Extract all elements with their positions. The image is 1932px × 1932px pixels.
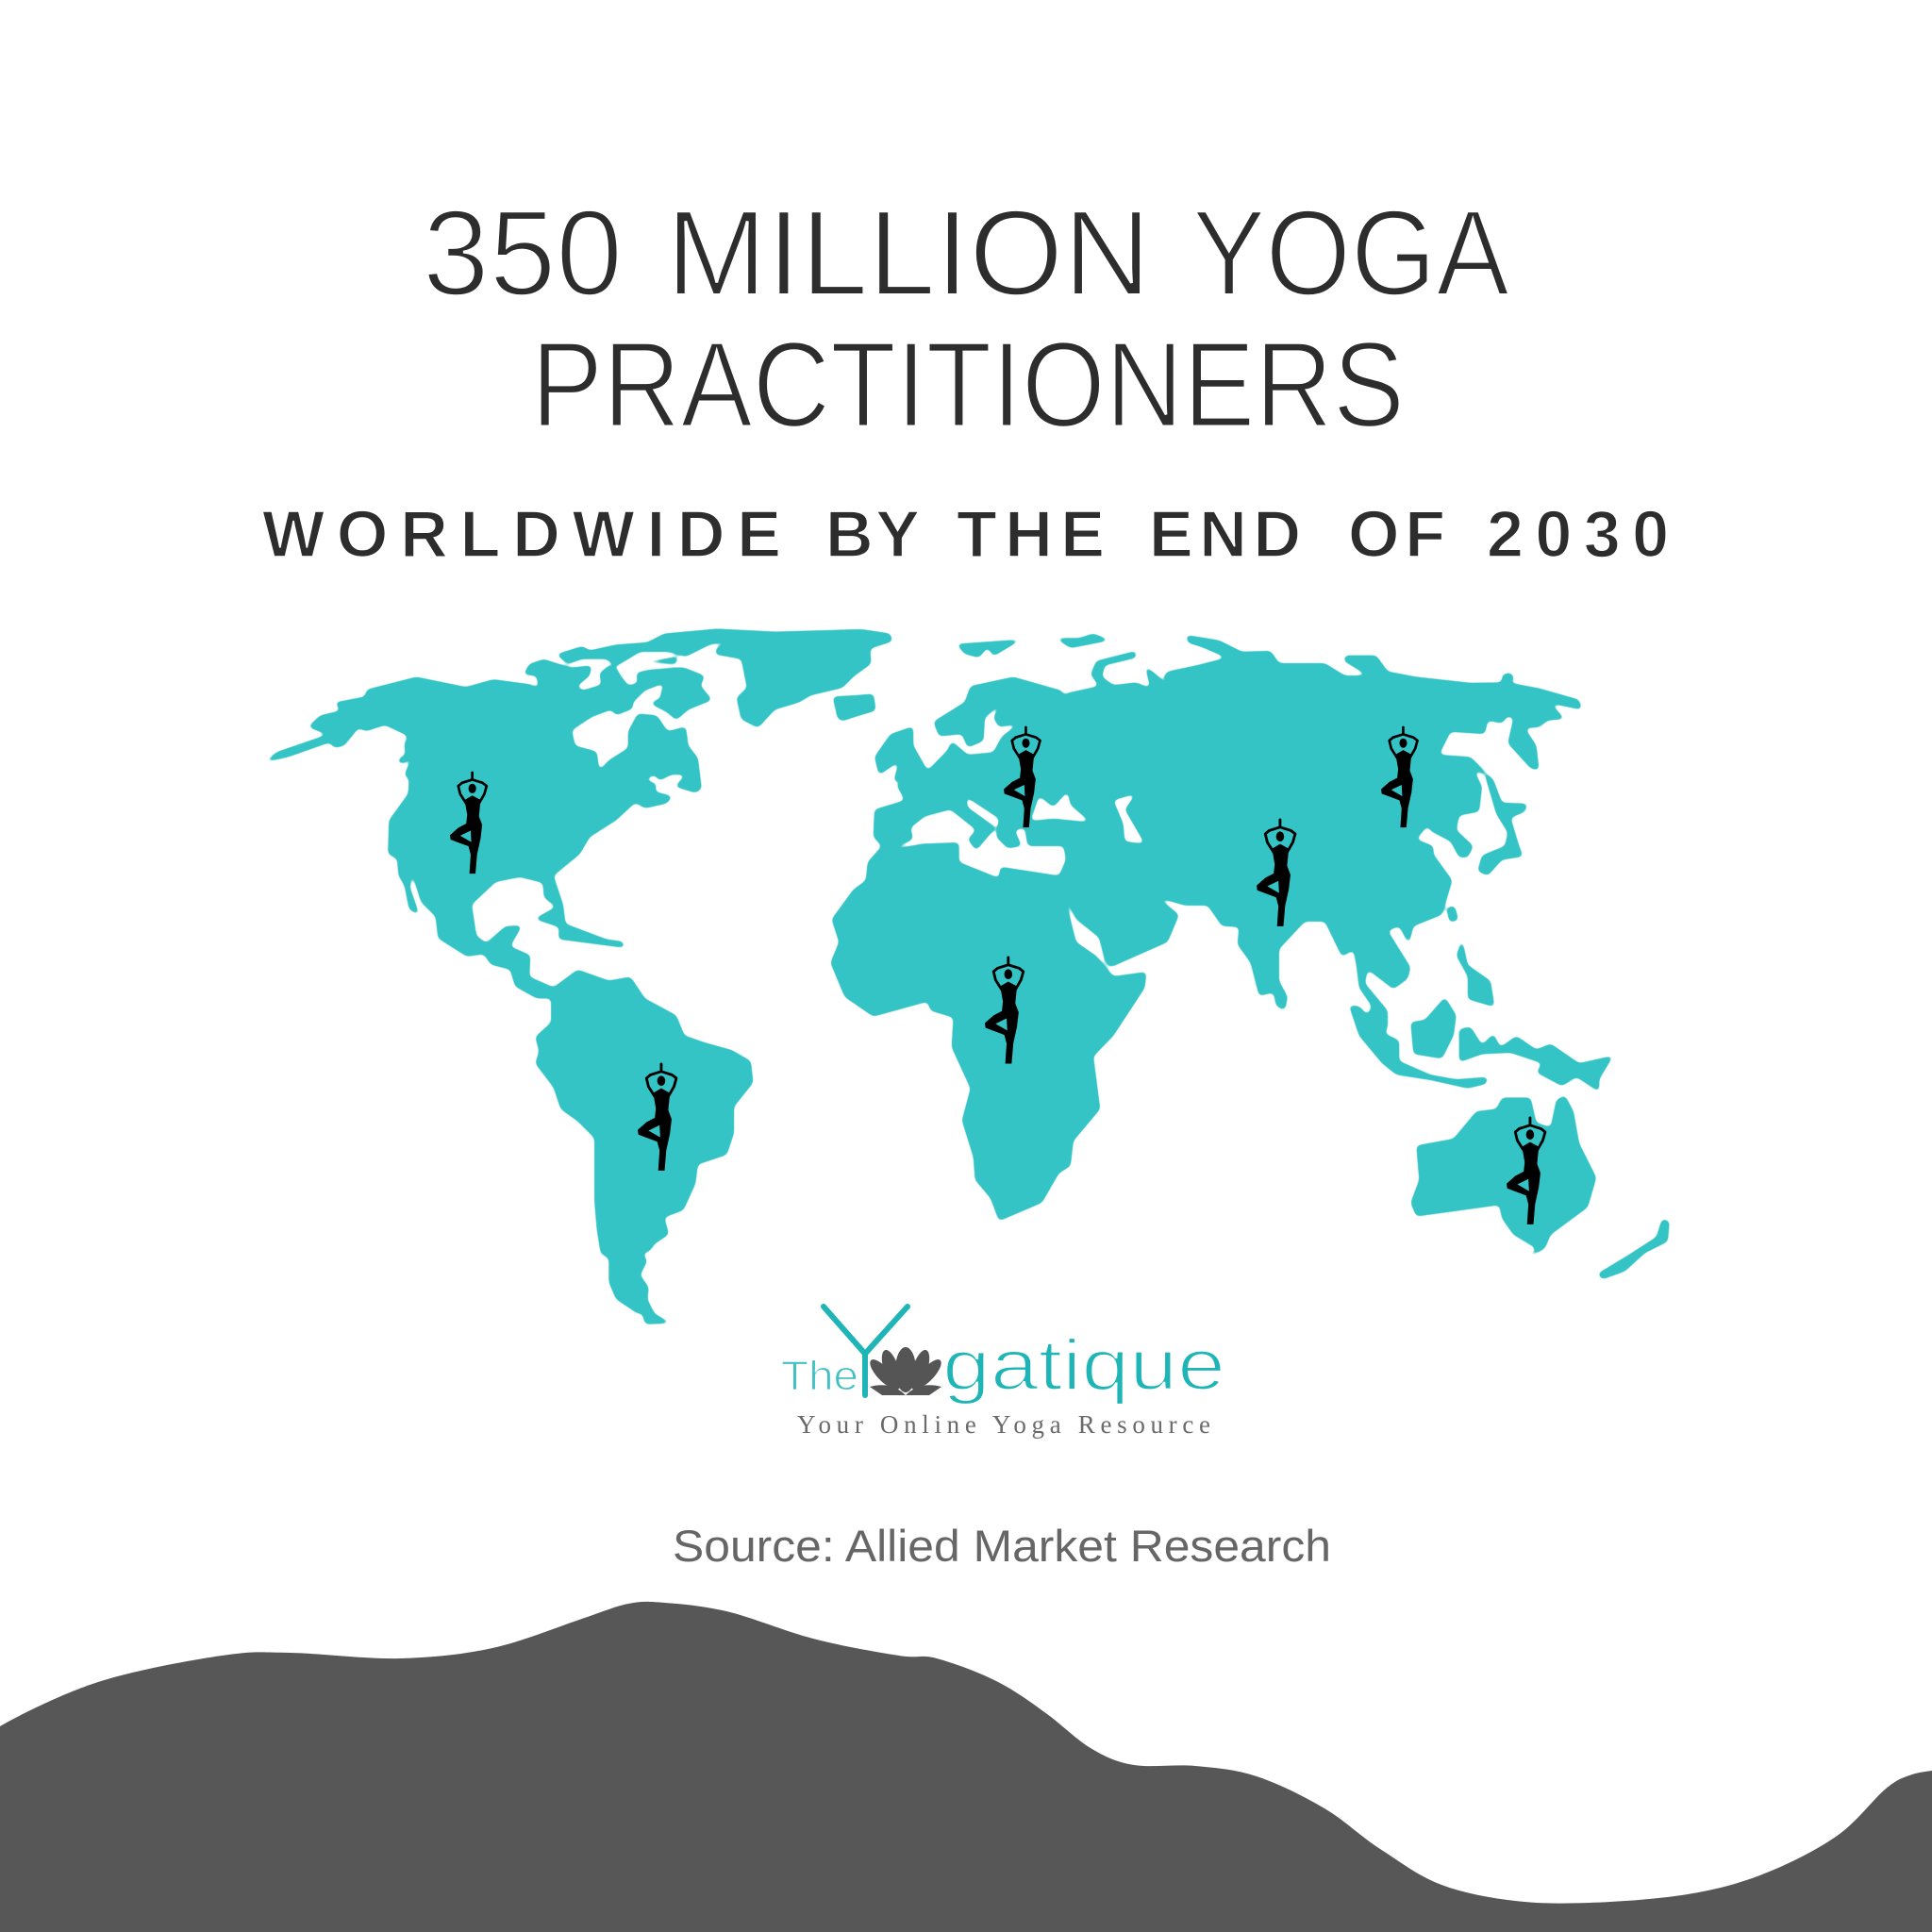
icon: yoga figure north america — [450, 773, 487, 874]
subtitle: BY — [825, 497, 920, 571]
source line: Source: Allied Market Research — [673, 1521, 1331, 1571]
icon: yoga figure south america — [638, 1064, 676, 1171]
subtitle: THE — [957, 497, 1105, 571]
logo word The: The — [781, 1353, 858, 1399]
subtitle: WORLDWIDE — [262, 497, 781, 571]
bottom hill shape — [0, 1602, 1932, 1932]
subtitle: END — [1149, 497, 1301, 571]
title: 350 million yoga practitioners: 350 — [423, 185, 623, 321]
logo tagline: Your Online Yoga Resource — [797, 1410, 1210, 1439]
logo letter Y — [824, 1307, 908, 1395]
subtitle: 2030 — [1487, 497, 1669, 571]
eurasia, africa, oceania — [830, 634, 1670, 1279]
logo: the yogatique — [781, 1307, 1225, 1439]
world map — [264, 629, 1670, 1324]
icon: yoga figure australia — [1507, 1118, 1545, 1224]
title: 350 million yoga practitioners — [423, 185, 1509, 453]
logo word gatique: gatique — [942, 1325, 1225, 1406]
icon: yoga figure africa — [985, 958, 1024, 1063]
title: 350 million yoga practitioners: YOGA — [1192, 185, 1509, 321]
title: 350 million yoga practitioners: PRACTITIONERS — [531, 317, 1405, 453]
title: 350 million yoga practitioners: MILLION — [666, 185, 1151, 321]
subtitle — [262, 497, 1669, 571]
icon: yoga figure central asia — [1257, 820, 1295, 926]
icon: yoga figure europe — [1004, 727, 1041, 827]
subtitle: OF — [1348, 497, 1445, 571]
americas — [264, 629, 892, 1324]
logo lotus — [866, 1347, 945, 1395]
icon: yoga figure east asia — [1381, 727, 1418, 827]
